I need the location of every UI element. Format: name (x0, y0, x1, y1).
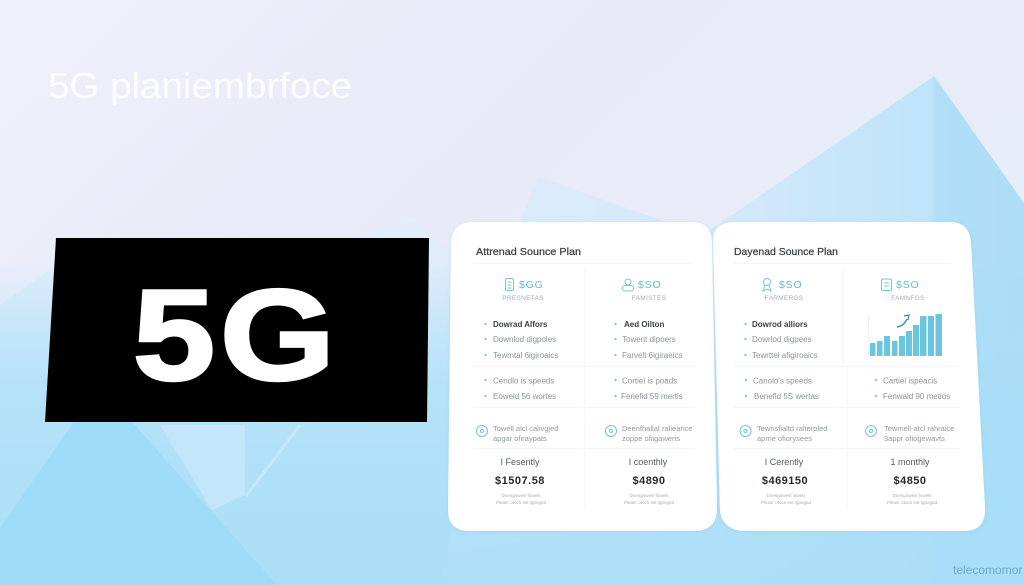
right card column one note (740, 424, 827, 443)
right card column one price: Pleasr otocs est igpogad (761, 500, 812, 505)
5G logo panel (45, 238, 429, 422)
bar chart with rising arrow (868, 314, 942, 356)
right card column two price: Doesgowesl lowels (892, 493, 932, 498)
right card column two price: Pleasr otocs est igpogad (887, 500, 938, 505)
right card column two header: $SO (896, 279, 919, 291)
panel: left plan card (448, 222, 717, 531)
left card column one note: apgar ofiraypats (493, 434, 547, 443)
right card column one note: Tewnsfialtd ralterpled (757, 424, 827, 433)
right card column two note (866, 424, 954, 443)
right card column one note: apme ofiorysees (757, 434, 812, 443)
left card column two price (624, 457, 675, 505)
right card column one header: $SO (779, 279, 802, 291)
left card column two features: Fenefid 59 mertis (621, 392, 683, 401)
left card column two price: $4890 (632, 475, 666, 487)
right card column two price: $4850 (893, 475, 927, 487)
right card column one features: Dowrlod digpees (752, 335, 812, 344)
left card column two features: Aed Oilton (624, 320, 665, 329)
right card column one price: Doesgowesl lowels (766, 493, 806, 498)
left card column one features: Eoweld 56 wortes (493, 392, 556, 401)
left card column one header: $GG (519, 279, 544, 291)
left card column one features (484, 320, 558, 401)
right card heading: Dayenad Sounce Plan (734, 246, 838, 258)
left card column two note: Deenfhallat ralieance (622, 424, 692, 433)
left card column two price: Doesgowesl lowels (629, 493, 669, 498)
left card column one price: I Fesently (500, 457, 540, 467)
right card column two price: 1 monthly (890, 457, 930, 467)
left card column one features: Downlod digpoles (493, 335, 556, 344)
left card column two header: $SO (638, 279, 661, 291)
left card column one price (495, 457, 547, 505)
left card column one price: $1507.58 (495, 475, 545, 487)
right card column one features: Tewrttel afigiroaics (752, 351, 818, 360)
left card column one features: Tewmtal 6igiroaics (493, 351, 558, 360)
left card column one header (502, 278, 544, 302)
right card column two note: 3appr ofiogewavts (884, 434, 945, 443)
left card column two features: Farvelt 6igiraeics (622, 351, 682, 360)
right card column one header (763, 278, 804, 302)
left card column two header: FAMISTES (632, 295, 667, 302)
panel: right plan card (713, 222, 985, 531)
title: 5G planiembrfoce (48, 65, 352, 106)
5G logo panel: G (220, 264, 335, 408)
left card heading: Attrenad Sounce Plan (476, 246, 581, 258)
left card column two price: I coenthly (629, 457, 668, 467)
left card column one price: Pleasr otocs est igpogad (496, 500, 547, 505)
watermark: telecomomor (953, 563, 1022, 577)
left card column two price: Pleasr otocs est igpogad (624, 500, 675, 505)
right card column two header (882, 279, 925, 302)
left card column two features: Cortiel is poads (622, 376, 677, 386)
right card column one features (744, 320, 819, 401)
left card column two features (614, 320, 683, 401)
right card column one price: I Cerently (765, 457, 804, 467)
left card column two features: Towent dipoers (622, 335, 676, 344)
left card column one features: Cendlo is speeds (493, 376, 554, 386)
right card column two note: Tewmell-atcl rahraice (884, 424, 954, 433)
right card column two features: Cartiel ispeacis (883, 376, 937, 386)
right card column one features: Benefld 5S wertas (754, 392, 819, 401)
left card column one features: Dowrad Alfors (493, 320, 548, 329)
5G logo panel: 5 (133, 264, 215, 408)
right card column two features (875, 376, 950, 401)
left card column one note (476, 424, 558, 443)
right card column two price (887, 457, 938, 505)
right card column one price (761, 457, 812, 505)
right card column one price: $469150 (762, 475, 808, 487)
right card column one features: Dowrod alliors (752, 320, 808, 329)
left card column two note: zoppe ofiigaweris (622, 434, 680, 443)
right card column two header: FAMNFGS (891, 295, 925, 302)
left card column one note: Towell alcl calivgjed (493, 424, 558, 433)
left card column two note (606, 424, 692, 443)
right card column two features: Fenwald 90 metios (883, 392, 950, 401)
left card column one price: Doesgowesl lowels (501, 493, 541, 498)
right card column one header: FARMERGS (765, 295, 804, 302)
left card column two header (622, 279, 667, 302)
right card column one features: Canolo's speeds (753, 376, 812, 386)
left card column one header: PRESNETAS (502, 295, 544, 302)
